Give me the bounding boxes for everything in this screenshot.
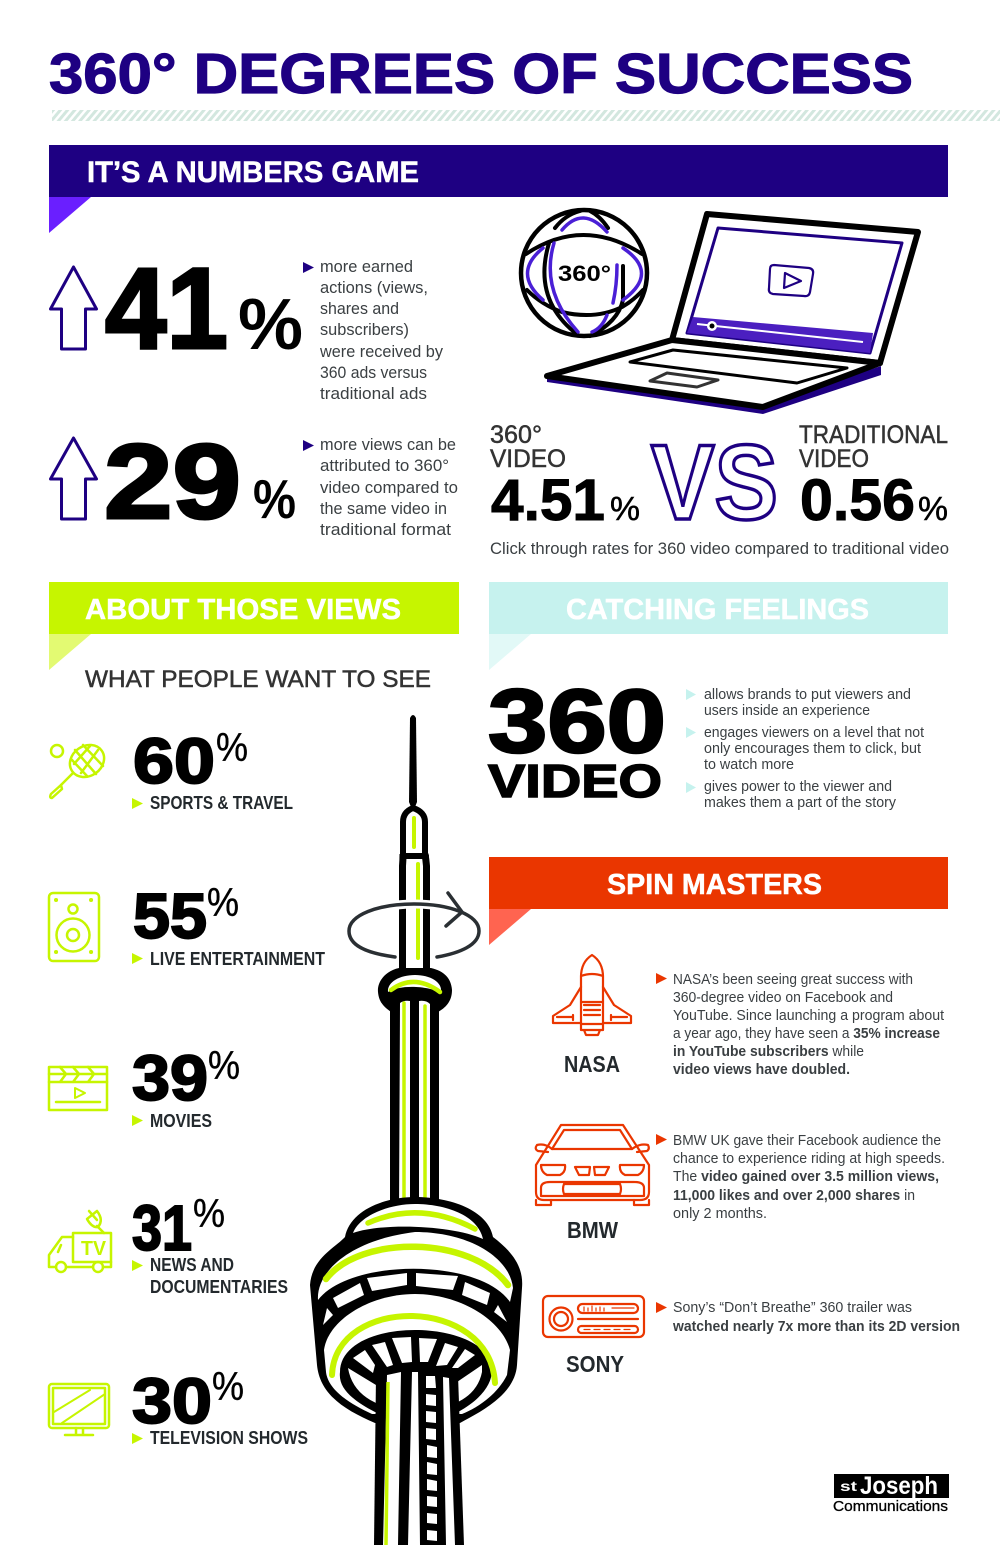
icon: speaker [49, 893, 99, 961]
banner: it's a numbers game: IT’S A NUMBERS GAME [87, 156, 419, 189]
stat: 41 percent: shares and [320, 300, 399, 318]
brand: BMW: chance to experience riding at high speeds. [673, 1151, 945, 1167]
stat: 41 percent: more earned [320, 258, 413, 276]
heading: 360 video [488, 672, 666, 807]
icon: 360 globe [521, 210, 647, 336]
brand: BMW: only 2 months. [673, 1206, 767, 1222]
list: benefits of 360 video: gives power to the viewer and [704, 779, 892, 795]
list: benefits of 360 video [686, 687, 924, 811]
heading: what people want to see: WHAT PEOPLE WANT TO SEE [85, 666, 431, 693]
list: benefits of 360 video: engages viewers on a level that not [704, 725, 924, 741]
comparison: 360 video versus traditional video: Click through rates for 360 video compared to traditional video [490, 540, 949, 558]
brand: NASA [553, 955, 944, 1078]
stat: television shows: % [212, 1365, 244, 1409]
icon: up arrow [50, 267, 96, 349]
list: benefits of 360 video: allows brands to put viewers and [704, 687, 911, 703]
icon: TV news van [49, 1211, 111, 1272]
comparison: 360 video versus traditional video: VIDEO [490, 445, 566, 473]
stat: sports and travel: 60 [133, 725, 215, 797]
stat: 29 percent: video compared to [320, 479, 458, 497]
list: benefits of 360 video: only encourages them to click, but [704, 741, 921, 757]
logo: St Joseph Communications: st [840, 1478, 857, 1494]
stat: television shows: TELEVISION SHOWS [150, 1428, 308, 1448]
heading: 360 video: 360 [488, 672, 666, 772]
brand: Sony: Sony’s “Don’t Breathe” 360 trailer was [673, 1300, 912, 1316]
heading: 360 video: VIDEO [488, 755, 662, 807]
icon: tennis racket [50, 738, 110, 798]
stat: 29 percent: attributed to 360° [320, 457, 449, 475]
icon: film clapper [49, 1067, 107, 1110]
stat: television shows [49, 1365, 308, 1448]
banner: catching feelings: CATCHING FEELINGS [566, 594, 869, 626]
brand: BMW: BMW UK gave their Facebook audience the [673, 1133, 941, 1149]
brand: Sony: SONY [566, 1351, 624, 1377]
stat: news and documentaries: DOCUMENTARIES [150, 1277, 288, 1297]
comparison: 360 video versus traditional video: VIDEO [799, 445, 869, 473]
icon: space shuttle [553, 955, 631, 1035]
stat: television shows: 30 [132, 1365, 212, 1437]
brand: NASA: a year ago, they have seen a 35% increase [673, 1026, 940, 1042]
icon: up arrow [50, 438, 96, 519]
list: benefits of 360 video: to watch more [704, 757, 794, 773]
stat: sports and travel: % [216, 726, 248, 770]
comparison: 360 video versus traditional video: VS [651, 422, 778, 542]
brand: BMW: BMW [567, 1217, 618, 1243]
stat: 41 percent: 360 ads versus [320, 364, 427, 382]
stat: 41 percent: % [238, 285, 303, 365]
brand: Sony [543, 1296, 960, 1377]
comparison: 360 video versus traditional video: TRADITIONAL [799, 421, 948, 449]
stat: news and documentaries [49, 1192, 288, 1297]
logo: St Joseph Communications [833, 1472, 949, 1515]
banner: it's a numbers game [49, 145, 948, 233]
stat: 41 percent: actions (views, [320, 279, 428, 297]
banner: about those views: ABOUT THOSE VIEWS [85, 594, 401, 626]
stat: movies: 39 [132, 1042, 208, 1114]
stat: 29 percent: traditional format [320, 521, 451, 539]
icon: television [49, 1384, 109, 1435]
comparison: 360 video versus traditional video: 4.51 [491, 468, 605, 533]
brand: NASA: YouTube. Since launching a program about [673, 1008, 944, 1024]
brand: BMW: The video gained over 3.5 million views, [673, 1169, 939, 1185]
stat: live entertainment: % [207, 881, 239, 925]
stat: 29 percent: the same video in [320, 500, 447, 518]
stat: news and documentaries: NEWS AND [150, 1255, 234, 1275]
brand: Sony: watched nearly 7x more than its 2D version [672, 1319, 960, 1335]
banner: catching feelings [489, 582, 948, 670]
illustration: CN tower with rotation arrow [310, 715, 522, 1545]
stat: live entertainment: LIVE ENTERTAINMENT [150, 949, 325, 969]
comparison: 360 video versus traditional video [490, 421, 949, 558]
stat: 41 percent: 41 [105, 245, 228, 373]
stat: 29 percent: % [253, 468, 296, 530]
title: 360° DEGREES OF SUCCESS [49, 42, 913, 106]
stat: 29 percent: more views can be [320, 436, 456, 454]
comparison: 360 video versus traditional video: 0.56 [800, 468, 915, 533]
stat: news and documentaries: 31 [132, 1192, 192, 1264]
icon: TV news van: TV [81, 1238, 107, 1260]
banner: spin masters [489, 857, 948, 945]
rotation arrow [349, 893, 479, 957]
banner: about those views [49, 582, 459, 670]
stat: movies: MOVIES [150, 1111, 212, 1131]
stat: sports and travel [50, 725, 293, 813]
brand: NASA: NASA’s been seeing great success with [673, 972, 913, 988]
list: benefits of 360 video: users inside an experience [704, 703, 870, 719]
brand: NASA: video views have doubled. [673, 1062, 850, 1078]
stat: movies: % [208, 1044, 240, 1088]
tower spire and upper shaft [402, 715, 426, 972]
icon: 360 globe: 360° [558, 261, 611, 286]
stat: live entertainment: 55 [133, 880, 207, 952]
stat: live entertainment [49, 880, 325, 969]
brand: NASA: NASA [564, 1051, 620, 1077]
stat: 41 percent: traditional ads [320, 385, 427, 403]
icon: radio [543, 1296, 644, 1337]
observation pod [310, 1197, 522, 1545]
brand: BMW: 11,000 likes and over 2,000 shares in [673, 1188, 915, 1204]
stat: 29 percent [50, 423, 458, 541]
comparison: 360 video versus traditional video: % [918, 490, 948, 527]
stat: news and documentaries: % [193, 1192, 225, 1236]
list: benefits of 360 video: makes them a part of the story [704, 795, 897, 811]
logo: St Joseph Communications: Joseph [860, 1472, 938, 1500]
stat: 29 percent: 29 [104, 423, 241, 541]
brand: BMW [536, 1125, 945, 1243]
comparison: 360 video versus traditional video: % [610, 490, 640, 527]
stat: sports and travel: SPORTS & TRAVEL [150, 793, 293, 813]
stat: 41 percent: subscribers) [320, 321, 409, 339]
icon: laptop with video player [547, 214, 918, 414]
brand: NASA: 360-degree video on Facebook and [673, 990, 893, 1006]
logo: St Joseph Communications: Communications [833, 1499, 948, 1515]
banner: spin masters: SPIN MASTERS [607, 869, 822, 901]
stat: 41 percent: were received by [319, 343, 444, 361]
stat: movies [49, 1042, 240, 1131]
brand: NASA: in YouTube subscribers while [673, 1044, 864, 1060]
comparison: 360 video versus traditional video: 360° [490, 421, 542, 449]
tower lower shaft and collar [378, 968, 452, 1215]
icon: car [536, 1125, 649, 1205]
stat: 41 percent [50, 245, 444, 403]
